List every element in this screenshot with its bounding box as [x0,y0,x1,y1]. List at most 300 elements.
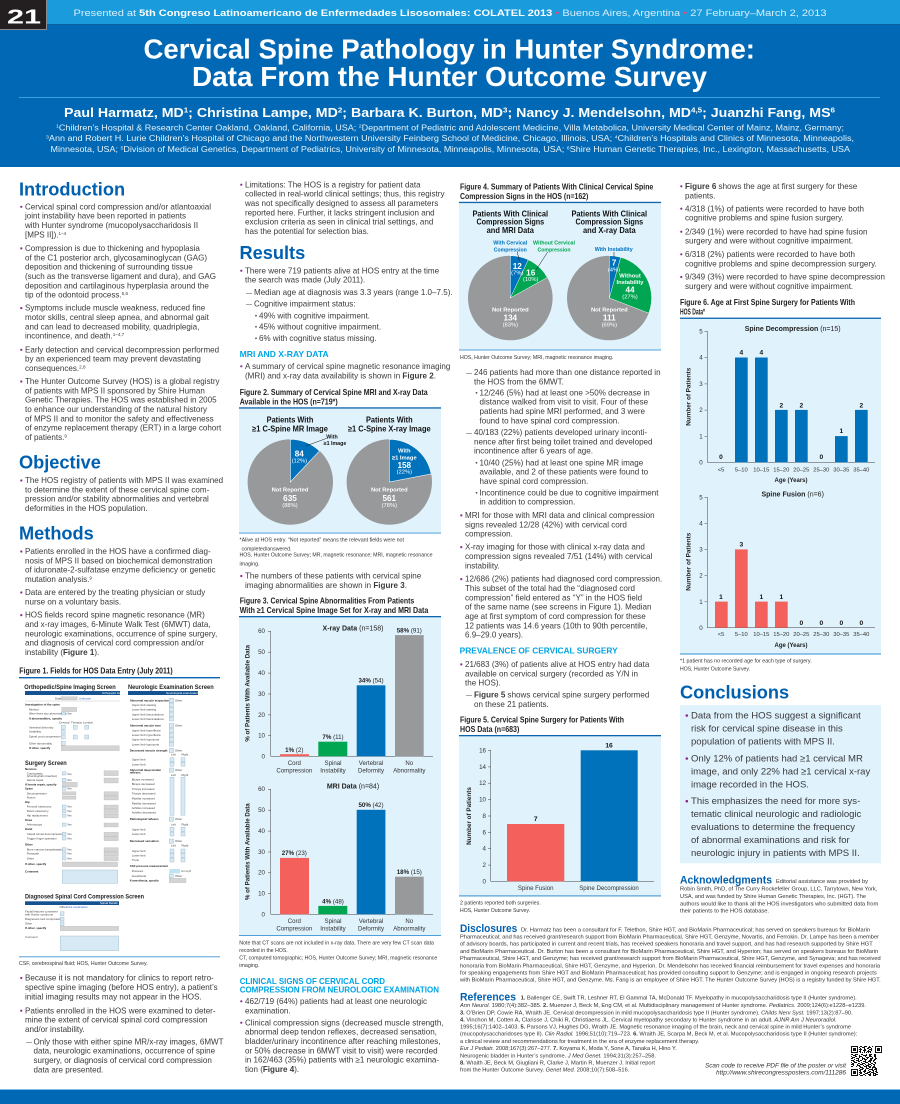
panel: figure 5 bar chart: 16 [479,748,487,754]
pie: MR image: ≥1 C-Spine MR Image [252,425,328,434]
neurologic examination screen: Upper limb fasciculations [132,712,164,716]
text block: retrospective imaging: mine the extent of cervical spinal cord compression [25,1016,207,1025]
text block: objective: The HOS registry of patients with MPS II was examined [25,476,223,485]
figure 2 footnotes: HOS, Hunter Outcome Survey; MR, magnetic resonance; MRI, magnetic resonance [240,552,432,558]
text block: lead-in to figure 3 [240,572,422,590]
pie: x-ray data: Without [619,273,641,279]
heading: Conclusions: Conclusions [680,682,789,702]
surgery screen: Bone marrow transplantation [27,847,64,851]
bar chart: x-ray data: % of Patients With Available Data [245,644,251,742]
figure 3 title [240,597,429,615]
text block: prevalence: the HOS). [465,679,501,688]
neurologic examination screen: Pathological reflexes [130,817,159,821]
affiliations: Ann and Robert H. Lurie Children’s Hospital of Chicago and the Northwestern University Feinberg School of Medicine, Chicago, Illinois, USA; [49,134,615,143]
text block: clinical signs detail: available, and 2 of these patients were found to [480,468,649,477]
figure 2 title: Available in the HOS (n=719*) [240,398,338,406]
surgery screen: If hernia repair, specify [25,782,57,786]
surgery screen: Yes [67,778,72,782]
neurologic examination screen: Upper limb [132,827,146,831]
authors: 6 [831,106,835,114]
text block: objective: pression and/or stability abnormalities and vertebral [25,495,209,504]
bar chart: spine fusion: Spine Fusion (n=6) [761,492,824,498]
figure 5 footnotes [460,900,541,914]
panel: figure 4 pie charts [459,202,661,350]
bar chart: spine fusion: <5 [718,632,724,638]
subheading: MRI and X-ray data: MRI AND X-RAY DATA [240,350,329,359]
bar chart: MRI data: 18% (15) [397,869,422,876]
text block: imaging summary [240,362,450,380]
authors: ; Barbara K. Burton, MD [342,105,503,120]
heading: Results: Results [240,243,305,263]
panel: figure 5 bar chart: 0 [483,878,487,886]
panel: figure 5 bar chart: 6 [483,829,487,836]
congress line: Presented at 5th Congreso Latinoamericano de Enfermedades Lisosomales: COLATEL 2013 • Buenos Aires, Argentina • 27 February–March 2, 2013 [74,8,827,18]
bar chart: spine decompression: 2 [799,402,803,409]
affiliations: 2 [359,124,362,129]
orthopedic spine imaging screen: If other, specify [29,746,51,750]
heading: Introduction: Introduction [19,180,125,200]
panel: figure 5 bar chart: 4 [483,846,487,853]
neurologic examination screen [128,684,214,883]
figure 1: HOS data entry screens [19,677,220,957]
affiliations: Shire Human Genetic Therapies, Inc., Lexington, Massachusetts, USA [570,145,851,154]
figure 2 title [240,388,428,406]
pie: x-ray image: (22%) [397,470,412,476]
bar chart: x-ray data: No [405,760,414,767]
references: Eur J Pediatr. 2008;167(3):267–277. 7. Koyama K, Moda Y, Sone A, Tanaka H, Hino Y. [460,1046,677,1052]
acknowledgments: Editorial assistance was provided by [776,879,868,885]
neurologic examination screen: Other [175,874,182,878]
text block: clinical signs detail: Incontinence could be due to cognitive impairment [480,488,659,497]
pie: MRI data: and MRI Data [487,226,534,235]
pie: MRI data: With Cervical [493,241,528,247]
title: Cervical Spine Pathology in Hunter Syndrome: [144,34,755,65]
panel: figure 5 bar chart: 12 [479,780,487,787]
surgery screen: Pelvic osteotomy [27,809,49,813]
figure 4 title [460,182,654,201]
pie: x-ray data: (27%) [622,295,638,301]
pie: MR image [248,416,346,525]
text block: clinical signs detail: in addition to compression. [480,498,575,507]
pie: x-ray data: (69%) [602,323,617,329]
bar chart: spine decompression: Number of Patients [686,367,692,426]
pie: x-ray image: Not Reported [371,488,408,494]
bar chart: spine decompression: 0 [719,454,723,461]
heading: Objective: Objective [19,452,101,472]
bar chart: spine decompression: 4 [699,355,703,362]
acknowledgments: their patients to the HOS database. [680,909,769,915]
panel: conclusions: This emphasizes the need for more sys- [691,796,860,807]
pie: x-ray image: ≥1 Image [392,455,417,461]
poster number badge [0,0,47,30]
neurologic examination screen: Right [182,752,188,756]
diagnosed spinal cord compression screen: Diagnosed Spinal Cord Compression Screen [25,893,144,900]
pie: x-ray image: 561 [382,494,397,503]
text block: introduction bullets: Cervical spinal cord compression and/or atlantoaxial [25,202,211,211]
text block: clinical signs detail: signs revealed 12/28 (42%) with cervical cord [465,520,627,529]
diagnosed spinal cord compression screen: Diagnosed cord compression [25,917,63,921]
neurologic examination screen: Lower limb hypotonia [132,742,159,746]
text block: imaging summary: (MRI) and x-ray data availability is shown in Figure 2. [245,371,436,380]
text block: retrospective imaging: — [26,1040,32,1046]
neurologic examination screen: Lower limb fasciculations [132,717,164,721]
QR scan caption [705,1063,847,1076]
text block: methods: instability (Figure 1). [25,648,99,657]
bar chart: spine decompression: 10–15 [753,468,769,474]
pie: x-ray image: ≥1 C-Spine X-ray Image [348,425,431,434]
text block: figure 6 lead-in: 4/318 (1%) of patients were recorded to have both [685,204,864,213]
bar chart: MRI data: 20 [258,870,266,877]
figure 6 footnotes [680,659,812,673]
text block: retrospective imaging: surgery, or diagnosis of cervical cord compression [34,1056,212,1065]
references: 3. O’Brien DP, Cowie RA, Wraith JE. Cervical decompression in mild mucopolysaccharidosis type II (Hunter syndrome). Childs Nerv Syst. 1997;13(2):87–90. [460,1010,853,1016]
text block: methods: neurologic examinations, occurrence of spine surgery, [25,629,217,638]
bar chart: MRI data: Deformity [358,925,385,932]
text block: introduction bullets: (such as the transverse ligament and dura), and GAG [25,272,216,281]
text block: objective: to determine the extent of these cervical spine com- [25,485,210,494]
QR scan caption: http://www.shirecongressposters.com/111286 [716,1070,847,1076]
text block: figure 6 lead-in: cognitive problems and spine decompression surgery. [685,259,877,268]
poster number badge: 21 [7,6,41,28]
text block: clinical signs: bladder/urinary incontinence after reaching milestones, [245,1037,440,1046]
figure 3 footnotes: imaging. [239,963,260,969]
panel: conclusions: Only 12% of patients had ≥1 cervical MR [691,753,863,764]
figure 1 footnote: CSF, cerebrospinal fluid; HOS, Hunter Outcome Survey. [19,961,148,967]
text block: introduction bullets: of MPS II and to monitor the safety and effectiveness [25,414,214,423]
text block: clinical signs detail: compression” field entered as “Y” in the HOS field [465,593,642,602]
text block: clinical signs detail: compression signs revealed 7/51 (14%) with cervical [465,552,653,561]
panel: conclusions: of abnormal examinations and risk for [691,835,851,846]
surgery screen: Other [27,856,34,860]
neurologic examination screen: Left [171,773,176,777]
bar chart: x-ray data: 1% (2) [285,747,303,754]
bar chart: spine decompression: 4 [759,349,763,356]
pie: x-ray data: 44 [625,285,635,294]
figure 3 title: With ≥1 Cervical Spine Image Set for X-ray and MRI Data [240,606,429,615]
affiliations: Children’s Hospitals and Clinics of Minnesota, Minneapolis, [618,134,854,143]
orthopedic spine imaging screen: Investigation of the spine [25,702,60,706]
text block: clinical signs: or 50% decrease in 6MWT visit to visit) were recorded [245,1046,438,1055]
references: References [460,992,516,1004]
surgery screen: Fusion [27,796,36,800]
bar chart: spine fusion: 1 [759,594,763,601]
text block: limitations [240,180,444,236]
subheading: clinical signs [240,977,439,995]
bar chart: MRI data: 50 [258,807,266,814]
icon: QR code [851,1046,882,1076]
text block: results [240,266,453,343]
panel: conclusions: image recorded in the HOS. [691,779,809,790]
text block: limitations: reported here. Further, it lacks stringent inclusion and [245,208,435,217]
bar chart: MRI data: 40 [258,828,266,835]
text block: introduction bullets: 2,8 [79,364,86,369]
text block: introduction bullets: of patients. [25,433,64,442]
bar chart: MRI data: 30 [258,849,266,856]
bar chart: x-ray data: 7% (11) [322,734,344,741]
bar chart: x-ray data: Abnormality [393,767,426,774]
text block: introduction bullets: deposition and cartilaginous hyperplasia around the [25,281,209,290]
figure 6 title [680,298,855,316]
QR scan caption: Scan code to receive PDF file of the poster or visit [705,1063,846,1070]
text block: retrospective imaging: Patients enrolled in the HOS were examined to deter- [25,1006,216,1015]
text block: figure 6 lead-in: 6/318 (2%) patients were recorded to have both [685,250,855,259]
surgery screen: Carpal tunnel decompression [27,832,65,836]
neurologic examination screen: Neurologic Examination Screen [128,684,214,691]
bar chart: spine decompression: 0 [819,454,823,461]
text block: methods: and diagnosis of cervical cord compression and/or [25,639,204,648]
figure 4 title: Compression Signs in the HOS (n=162) [460,192,589,201]
pie: x-ray data: Patients With Clinical [571,209,647,218]
text block: clinical signs detail: the HOS from the 6MWT. [474,377,564,386]
surgery screen: Nervous [25,767,37,771]
text block: clinical signs detail: 12/686 (2%) patients had diagnosed cord compression. [465,575,662,584]
neurologic examination screen: Decreased sensation [130,839,159,843]
text block: methods: nosis of MPS II based on biochemical demonstration [25,556,212,565]
pie: MRI data [468,209,575,340]
text block: clinical signs detail: distance walked from visit to visit. Four of these [480,398,649,407]
neurologic examination screen: Left [171,752,176,756]
affiliations: Children’s Hospital & Research Center Oakland, Oakland, California, USA; [59,123,359,132]
acknowledgments: USA, and was funded by Shire Human Genetic Therapies, Inc. (HGT). The [680,894,867,900]
bar chart: x-ray data: Compression [276,767,312,774]
surgery screen: Comment [25,869,38,873]
neurologic examination screen: Patellar decreased [132,801,156,805]
neurologic examination screen: Right [182,823,188,827]
pie: MRI data: Compression [494,247,527,253]
subheading: clinical signs: COMPRESSION FROM NEUROLOGIC EXAMINATION [240,986,439,995]
panel: figure 5 bar chart: 14 [479,764,487,771]
bar chart: spine fusion: 1 [719,594,723,601]
bar chart: x-ray data: 34% (54) [358,678,384,684]
bar chart: spine fusion: 0 [699,625,703,632]
text block: methods: nurse on a voluntary basis. [25,597,121,606]
text block: methods: mutation analysis. [25,575,89,584]
text block: results: 45% without cognitive impairment. [259,322,381,331]
diagnosed spinal cord compression screen: with Hunter syndrome [25,912,54,916]
text block: introduction bullets: with Hunter syndrome (mucopolysaccharidosis II [24,221,198,230]
diagnosed spinal cord compression screen [25,893,144,951]
heading: Methods: Methods [19,524,94,544]
surgery screen: Trigger finger operation [27,836,57,840]
text block: retrospective imaging: Only those with either spine MR/x-ray images, 6MWT [34,1037,224,1046]
text block: prevalence: Figure 5 shows cervical spine surgery performed [474,691,649,700]
pie: MRI data: (10%) [523,277,538,283]
surgery screen: Cranioplasty [27,771,43,775]
authors: 1 [184,106,188,114]
pie: MR image: ≥1 Image [324,441,346,447]
neurologic examination screen: Decreased muscle strength [130,748,168,752]
bar chart: spine fusion: 3 [739,541,743,548]
orthopedic spine imaging screen: Method [29,707,39,711]
figure 6 footnotes: *1 patient has no recorded age for each type of surgery. [680,659,812,665]
bar chart: spine fusion: 0 [839,620,843,627]
bar chart: spine fusion: 5 [699,494,703,501]
pie: x-ray image: 158 [397,461,412,470]
figure 2 footnotes: imaging. [240,562,260,568]
bar chart: x-ray data: Cord [288,760,301,767]
surgery screen [25,760,118,883]
bar chart: spine fusion: 10–15 [753,632,769,638]
authors: 4,5 [691,106,702,114]
orthopedic spine imaging screen: Were there any abnormalities [29,711,67,715]
text block: clinical signs detail: compression. [465,530,513,539]
text block: introduction bullets: of enzyme replacement therapy (ERT) in a large cohort [25,424,222,433]
figure 6 footnotes: HOS, Hunter Outcome Survey. [680,667,750,673]
bar chart: spine decompression: 0 [699,460,703,466]
orthopedic spine imaging screen: Thoracic [71,721,83,725]
bar chart: MRI data: No [405,918,414,925]
authors: ; Juanzhi Fang, MS [702,105,831,120]
text block: introduction bullets: [MPS II]). [25,230,59,239]
text block: clinical signs detail: 6.9–29.0 years). [465,631,523,640]
diagnosed spinal cord compression screen: Spinal Details [100,901,118,905]
header banner [0,0,900,167]
bar chart: x-ray data: Spinal [325,760,341,767]
text block: introduction bullets: of the C1 posterior arch, glycosaminoglycan (GAG) [25,253,207,262]
text block: clinical signs detail: This subset of the total had the “diagnosed cord [465,584,635,593]
pie: MRI data: (7%) [511,271,523,277]
bar chart: spine fusion: 35–40 [853,632,869,638]
disclosures: and BioMarin Pharmaceutical. Dr. Burton has been a consultant for BioMarin Pharmaceutical, Shire HGT, and Hyperion; has served on speakers bureaus for BioMarin [460,949,878,955]
text block: clinical signs detail: 10/40 (25%) had at least one spine MR image [480,458,644,467]
neurologic examination screen: Upper limb hypotonia [132,738,159,742]
bar chart: MRI data: 27% (23) [282,850,307,857]
panel: conclusions: tematic clinical neurologic and radiologic [691,809,862,820]
bar chart: spine fusion: 0 [859,620,863,627]
text block: figure 6 lead-in: cognitive problems and spine fusion surgery. [685,214,844,223]
figure 3 footnotes [239,940,437,969]
figure 4 title: Figure 4. Summary of Patients With Clinical Cervical Spine [460,182,654,191]
text block: figure 6 lead-in [680,182,885,291]
orthopedic spine imaging screen [24,684,128,751]
orthopedic spine imaging screen: Orthopedic Imaging [102,691,128,695]
text block: figure 6 lead-in: 9/349 (3%) were recorded to have spine decompression [685,273,885,282]
bar chart: MRI data: 10 [258,891,266,898]
surgery screen: Arthroscopy [27,823,43,827]
bar chart: MRI data: 0 [262,912,266,918]
bar chart: x-ray data: 40 [258,670,266,677]
neurologic examination screen: Triceps increased [132,787,155,791]
text block: limitations: has the potential for selection bias. [245,227,369,236]
bar chart: spine fusion: 0 [819,620,823,627]
bar chart: MRI data: 60 [258,786,266,793]
references: Ann Neurol. 1980;7(4):382–385. 2. Muenzer J, Beck M, Eng CM, et al. Multidisciplinary management of Hunter syndrome. Pediatrics. 2009;124(6):e1228–e1239. [459,1003,866,1009]
text block: prevalence: on these 21 patients. [474,700,549,709]
text block: results: 6% with cognitive status missing. [259,334,377,343]
text block: lead-in to figure 3: The numbers of these patients with cervical spine [245,572,422,581]
panel: figure 5 bar chart: 8 [483,813,487,820]
bar chart: spine fusion: Age (Years) [774,643,808,649]
text block: clinical signs detail [460,368,662,640]
text block: introduction bullets: deposition and thickening of surrounding tissue [25,263,193,272]
bar chart: MRI data: Abnormality [393,925,426,932]
panel: figure 5 bar chart: 10 [479,797,487,804]
neurologic examination screen: Lower limb [132,762,146,766]
title [144,34,755,92]
bar chart: spine fusion: 2 [699,573,703,580]
surgery screen: Hand [25,827,32,831]
pie: MRI data: Not Reported [492,307,529,313]
text block: imaging summary: A summary of cervical spine magnetic resonance imaging [245,362,450,371]
surgery screen: Yes [67,847,72,851]
text block: limitations: Limitations: The HOS is a registry for patient data [245,180,421,189]
affiliations: Division of Medical Genetics, Department of Pediatrics, University of Minnesota, Minneapolis, Minnesota, USA; [123,145,567,154]
neurologic examination screen: Lower limb wasting [132,707,157,711]
bar chart: MRI data: % of Patients With Available Data [245,803,251,900]
text block: prevalence: 21/683 (3%) of patients alive at HOS entry had data [465,660,650,669]
panel: conclusions: image, and only 22% had ≥1 cervical x-ray [691,766,870,777]
text block: figure 6 lead-in: surgery and were without cognitive impairment. [685,237,853,246]
figure 5 title: HOS Data (n=683) [460,725,520,734]
text block: limitations: exclusion criteria as seen in clinical trial settings, and [245,218,433,227]
orthopedic spine imaging screen: Unknown [79,696,91,700]
text block: clinical signs detail: instability. [465,561,500,570]
figure 4 footnote: HOS, Hunter Outcome Survey; MRI, magnetic resonance imaging. [460,355,614,361]
bar chart: MRI data: Cord [288,918,301,925]
bar chart: spine decompression: 2 [859,402,863,409]
surgery screen: (shunting/skin insertion) [27,774,57,778]
bar chart: x-ray data: Vertebral [359,760,383,767]
text block: introduction bullets: 1–4 [59,231,67,236]
orthopedic spine imaging screen: Date [55,696,61,700]
neurologic examination screen: Biceps decreased [132,782,155,786]
neurologic examination screen: Lower limb hyperflexia [132,733,161,737]
diagnosed spinal cord compression screen: Other [60,905,67,909]
surgery screen: Portacath [27,852,39,856]
neurologic examination screen: Triceps decreased [132,792,156,796]
orthopedic spine imaging screen: Yes [67,711,72,715]
bar chart: spine decompression: 3 [699,381,703,388]
text block: retrospective imaging: initial imaging results may not appear in the HOS. [25,992,202,1001]
neurologic examination screen: Other [175,748,182,752]
text block: introduction bullets: consequences. [25,364,79,373]
text block: methods: of iduronate-2-sulfatase enzyme deficiency or genetic [25,566,216,575]
disclosures: of advisory boards, has participated in current and recent trials, has received speakers honoraria and travel support, and has had research supported by Shire HGT [460,942,873,948]
pie: x-ray data: Not Reported [591,307,628,313]
figure 3 title: Figure 3. Cervical Spine Abnormalities From Patients [240,597,415,606]
surgery screen: Yes [67,823,72,827]
bar chart: spine decompression: 4 [739,349,743,356]
affiliations: Minnesota, USA; [50,145,110,154]
neurologic examination screen: Anesthesia [132,874,146,878]
pie: MR image: With [326,435,338,441]
references: a clinical review and recommendations for treatment in the era of enzyme replacement therapy. [460,1039,700,1045]
authors: Paul Harmatz, MD [64,105,176,120]
pie: x-ray image: Patients With [366,416,413,424]
surgery screen: Hip [25,800,30,804]
bar chart: spine decompression: Spine Decompression (n=15) [745,326,841,333]
disclosures: for speaking engagements from Shire HGT and BioMarin Pharmaceutical; has provided consulting support to Genzyme; and is engaged in ongoing research projects [460,970,877,976]
neurologic examination screen: Abnormal muscle tone [130,723,161,727]
panel: figure 5 bar chart [459,735,661,896]
text block: methods: and x-ray images, 6-Minute Walk Test (6MWT) data, [25,620,211,629]
text block: introduction bullets: and can lead to decreased mobility, quadriplegia, [25,322,199,331]
text block: introduction bullets: motor skills, central sleep apnea, and abnormal gait [25,313,210,322]
text block: clinical signs: in 162/463 (35%) patients with ≥1 neurologic examina- [245,1056,439,1065]
text block: results: the search was made (July 2011). [245,276,365,285]
panel: figure 2 pie charts [239,407,441,534]
text block: retrospective imaging: and/or instability. [25,1025,85,1034]
text block: introduction bullets: 9 [64,434,67,438]
neurologic examination screen: Trunk [132,858,140,862]
orthopedic spine imaging screen: Spinal cord compression [29,735,61,739]
text block: results: Cognitive impairment status: [254,300,356,309]
text block: clinical signs detail: X-ray imaging for those with clinical x-ray data and [465,543,645,552]
text block: introduction bullets: 5,6 [122,291,128,296]
text block: introduction bullets: Genetic Therapies. The HOS was established in 2005 [25,396,217,405]
disclosures: Disclosures [460,923,517,935]
pie: MR image: (12%) [292,458,307,464]
